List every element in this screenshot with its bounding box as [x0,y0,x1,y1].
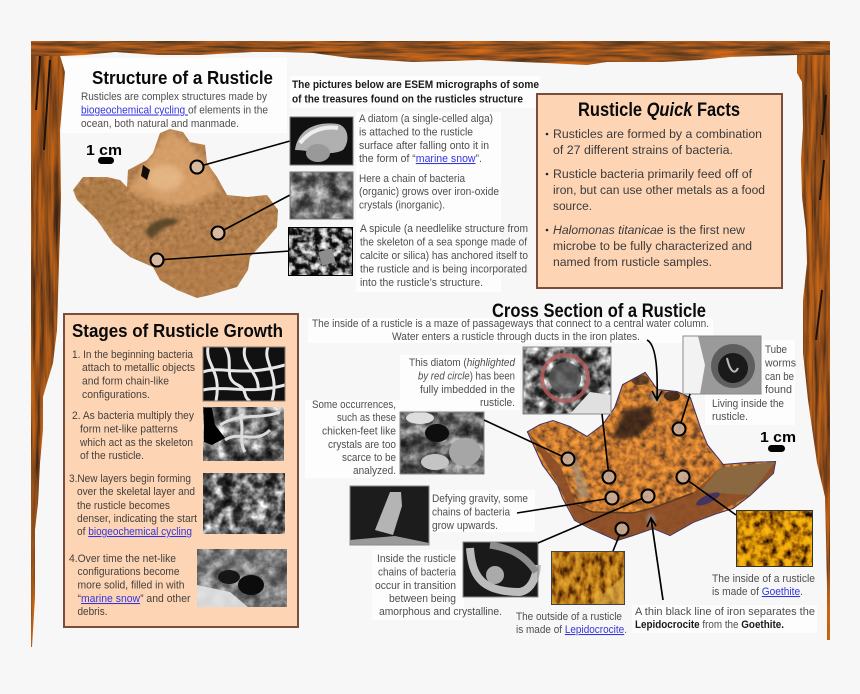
stage 3 text: denser, indicating the start [77,513,197,525]
caption: amorphous and crystalline: chains of bacteria [378,566,456,578]
caption: lepidocrocite [516,611,627,636]
caption: imbedded diatom: rusticle. [480,397,515,409]
caption: spicule [360,223,528,289]
fact 1: of 27 different strains of bacteria. [553,143,733,157]
micrograph: amorphous bacteria chains [463,542,538,597]
caption: chicken-feet crystals: scarce to be [342,452,396,464]
caption: diatom: is attached to the rusticle [359,126,473,138]
stage 1 text: attach to metallic objects [82,362,195,374]
caption: diatom: the form of “marine snow”. [359,153,482,165]
cross-section rusticle specimen photo [525,370,780,545]
caption: lepidocrocite: is made of Lepidocrocite. [516,624,627,636]
stage 2 text: 2. As bacteria multiply they [72,410,195,422]
intro text: ocean, both natural and manmade. [81,118,239,130]
caption: diatom: A diatom (a single-celled alga) [359,113,493,125]
caption: bacteria chain: (organic) grows over iron-oxide [359,186,499,198]
caption: spicule: the rusticle and is being incorporated [360,264,527,276]
leader lines: cross section [484,394,736,551]
caption: tube worms: worms [764,358,796,370]
scale: 1 cm: 1 cm [86,142,122,159]
caption: amorphous and crystalline: occur in transition [375,580,456,592]
caption: spicule: A spicule (a needlelike structure from [360,223,528,235]
heading: quick facts: Rusticle Quick Facts [578,100,740,121]
fact 1: Rusticles are formed by a combination [553,127,762,141]
stage 2 text [72,410,195,462]
caption: chicken-feet crystals: chicken-feet like [322,426,396,438]
micrograph: goethite [736,510,813,567]
heading: cross section: Cross Section of a Rusticle [492,301,706,322]
micrographs heading: The pictures below are ESEM micrographs of some [292,79,539,91]
stage 3 text: over the skeletal layer and [77,486,195,498]
stage 3 text: of biogeochemical cycling [77,526,192,538]
caption: amorphous and crystalline: amorphous and crystalline. [379,606,502,618]
stage 4 micrograph [197,549,287,607]
stage 1 text: 1. In the beginning bacteria [72,349,193,361]
stage 2 micrograph [203,407,284,461]
caption: bacteria chain: crystals (inorganic). [359,200,445,212]
caption: chicken-feet crystals: analyzed. [353,465,396,477]
caption: upward chains [432,493,528,532]
micrograph: diatom [290,117,353,165]
stage 2 text: of the rusticle. [80,450,144,462]
caption: imbedded diatom: This diatom (highlighted [409,357,516,369]
micrograph: bacteria chain [290,172,353,219]
fact 3: named from rusticle samples. [553,255,712,269]
caption: goethite [712,573,815,598]
micrograph: lepidocrocite [551,551,625,605]
caption: goethite: is made of Goethite. [712,586,803,598]
stage 3 micrograph [203,473,285,534]
caption: upward chains: chains of bacteria [432,506,510,518]
caption: upward chains: grow upwards. [432,520,498,532]
arrow: water enters through ducts [647,340,662,400]
marker circles [150,160,224,266]
caption: upward chains: Defying gravity, some [432,493,528,505]
caption: amorphous and crystalline [375,553,502,618]
stage 1 micrograph [203,347,285,401]
caption: thin black line of iron [635,606,815,631]
intro text: Rusticles are complex structures made by [81,91,268,103]
caption: thin black line of iron: Lepidocrocite from the Goethite. [635,619,784,631]
stage 1 text: configurations. [82,389,150,401]
intro text [81,91,268,130]
stage 2 text: form net-like patterns [80,424,178,436]
micrograph: tube worms [683,336,761,394]
stage 3 text: 3.New layers begin forming [69,473,191,485]
heading: structure: Structure of a Rusticle [92,68,273,88]
arrow: thin line of iron [647,518,663,600]
caption: spicule: into the rusticle’s structure. [360,277,483,289]
stage 4 text: configurations become [78,566,180,578]
micrograph: imbedded diatom [523,347,611,414]
caption: tube worms: found [765,384,792,396]
cross section intro [312,318,709,343]
caption: imbedded diatom: by red circle) has been [418,370,515,382]
fact 2 [546,167,765,213]
caption: spicule: the skeleton of a sea sponge made of [360,236,527,248]
caption: thin black line of iron: A thin black line of iron separates the [635,606,815,618]
stage 4 text [69,553,191,618]
stage 4 text: 4.Over time the net-like [69,553,176,565]
rusticle specimen photo [70,125,282,301]
micrograph: upward chain of bacteria [350,486,429,545]
marker circles: cross section [562,422,690,536]
cross section intro: The inside of a rusticle is a maze of passageways that connect to a central water column. [312,318,709,330]
stage 4 text: “marine snow” and other [78,593,191,605]
scale: 1 cm: 1 cm [760,429,796,446]
stage 4 text: more solid, filled in with [78,580,185,592]
caption: amorphous and crystalline: Inside the rusticle [377,553,456,565]
fact 2: Rusticle bacteria primarily feed off of [553,167,753,181]
fact 1 [546,127,762,157]
panel: stages of rusticle growth [64,314,298,627]
fact 2: source. [553,199,592,213]
caption: tube worms: Living inside the [712,398,784,410]
caption: goethite: The inside of a rusticle [712,573,815,585]
stage 2 text: which act as the skeleton [79,437,193,449]
leader lines to micrographs [157,141,290,260]
caption: tube worms: Tube [765,344,787,356]
caption: tube worms: can be [765,371,794,383]
section: ESEM micrographs [288,79,539,289]
section: cross section of a rusticle [312,301,815,636]
caption: spicule: calcite or silica) has anchored itself to [360,250,528,262]
micrograph: spicule [288,227,353,276]
micrographs heading [292,79,539,106]
stage 3 text: the rusticle becomes [77,500,170,512]
caption: imbedded diatom [409,357,516,409]
caption: chicken-feet crystals: such as these [337,412,396,424]
caption: diatom [359,113,493,165]
stage 1 text: and form chain-like [82,376,169,388]
micrographs heading: of the treasures found on the rusticles structure [292,94,523,106]
micrograph: chicken-feet crystals [400,412,484,474]
caption: chicken-feet crystals: Some occurrences, [312,399,396,411]
stage 1 text [72,349,195,401]
fact 3: Halomonas titanicae is the first new [553,223,745,237]
caption: chicken-feet crystals: crystals are too [328,439,396,451]
caption: bacteria chain: Here a chain of bacteria [359,173,465,185]
caption: lepidocrocite: The outside of a rusticle [516,611,622,623]
heading: stages: Stages of Rusticle Growth [72,321,283,341]
fact 2: iron, but can use other metals as a food [553,183,765,197]
stage 4 text: debris. [78,606,108,618]
intro text: biogeochemical cycling of elements in the [81,104,268,116]
caption: amorphous and crystalline: between being [389,593,456,605]
caption: bacteria chain [359,173,499,212]
fact 3 [546,223,752,269]
caption: imbedded diatom: fully imbedded in the [420,384,515,396]
caption: chicken-feet crystals [312,399,396,477]
stage 3 text [69,473,197,538]
panel: rusticle quick facts [537,94,782,288]
caption: tube worms [712,344,796,423]
caption: tube worms: rusticle. [712,411,748,423]
section: structure of a rusticle [70,68,290,301]
caption: diatom: surface after falling onto it in [359,140,489,152]
fact 3: microbe to be fully characterized and [553,239,752,253]
cross section intro: Water enters a rusticle through ducts in the iron plates. [392,331,640,343]
